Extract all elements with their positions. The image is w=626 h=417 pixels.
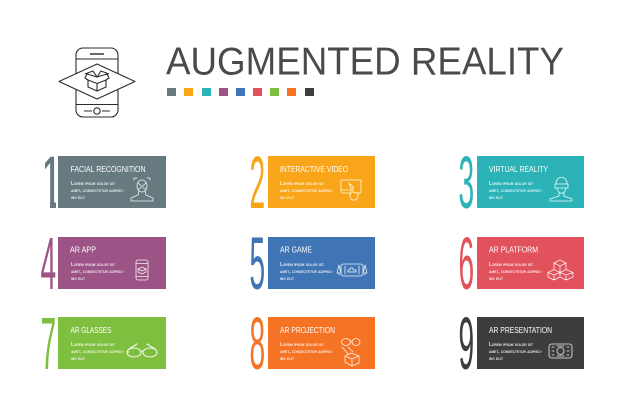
panel 4: AR app: AR APP bbox=[70, 246, 96, 254]
panel 8: AR projection: Lorem ipsum dolor sit bbox=[280, 342, 324, 348]
icon: cubes bbox=[548, 260, 573, 280]
panel 3: virtual reality: VIRTUAL REALITY bbox=[489, 165, 548, 174]
panel 4: AR app bbox=[40, 222, 166, 305]
icon: AR tablet bbox=[549, 344, 572, 358]
number 7: 7 bbox=[40, 302, 56, 385]
panel 3: virtual reality: Lorem ipsum dolor sit bbox=[489, 181, 533, 187]
panel 1: facial recognition: FACIAL RECOGNITION bbox=[70, 165, 146, 174]
panel 9: AR presentation: ing elit bbox=[489, 356, 503, 362]
panel 1: facial recognition: ing elit bbox=[71, 195, 85, 201]
panel 7: AR glasses: amet, consectetur adipisc- bbox=[71, 349, 124, 355]
panel 3: virtual reality: ing elit bbox=[489, 195, 503, 201]
panel 6: AR platform: amet, consectetur adipisc- bbox=[489, 269, 542, 275]
number 3: 3 bbox=[458, 141, 474, 224]
icon: touch video screen bbox=[341, 180, 361, 200]
title: AUGMENTED REALITY bbox=[166, 40, 564, 84]
number 5: 5 bbox=[250, 222, 265, 305]
icon: glasses projecting onto a box bbox=[342, 338, 360, 366]
panel 4: AR app: Lorem ipsum dolor sit bbox=[71, 262, 115, 268]
panel 7: AR glasses bbox=[40, 302, 166, 385]
panel 3: virtual reality: amet, consectetur adipisc- bbox=[489, 188, 542, 194]
icon: phone app bbox=[136, 260, 148, 280]
panel 9: AR presentation: AR PRESENTATION bbox=[489, 326, 552, 335]
panel 6: AR platform: AR PLATFORM bbox=[489, 246, 538, 254]
panel 7: AR glasses: ing elit bbox=[71, 356, 85, 362]
panel 6: AR platform: Lorem ipsum dolor sit bbox=[489, 262, 533, 268]
number 1: 1 bbox=[39, 141, 64, 224]
number 2: 2 bbox=[250, 141, 265, 224]
panel 2: interactive video: INTERACTIVE VIDEO bbox=[280, 165, 348, 174]
panel 9: AR presentation: Lorem ipsum dolor sit bbox=[489, 342, 533, 348]
panel 3: virtual reality bbox=[458, 141, 584, 224]
panel 5: AR game: Lorem ipsum dolor sit bbox=[280, 262, 324, 268]
panel 5: AR game: amet, consectetur adipisc- bbox=[280, 269, 333, 275]
number 6: 6 bbox=[458, 222, 474, 305]
icon: VR headset person bbox=[550, 177, 572, 201]
panel 1: facial recognition: Lorem ipsum dolor sit bbox=[71, 181, 115, 187]
panel 9: AR presentation: amet, consectetur adipisc- bbox=[489, 349, 542, 355]
panel 2: interactive video bbox=[250, 141, 375, 224]
icon: phone with AR box bbox=[59, 48, 135, 117]
icon: glasses bbox=[127, 344, 157, 357]
panel 6: AR platform: ing elit bbox=[489, 276, 503, 282]
panel 8: AR projection bbox=[250, 302, 375, 385]
panel 4: AR app: ing elit bbox=[71, 276, 85, 282]
panel 7: AR glasses: AR GLASSES bbox=[70, 326, 112, 335]
panel 4: AR app: amet, consectetur adipisc- bbox=[71, 269, 124, 275]
icon: face scan bbox=[131, 178, 153, 201]
panel 8: AR projection: AR PROJECTION bbox=[280, 326, 335, 335]
panel 2: interactive video: Lorem ipsum dolor sit bbox=[280, 181, 324, 187]
panel 8: AR projection: amet, consectetur adipisc- bbox=[280, 349, 333, 355]
panel 5: AR game bbox=[250, 222, 375, 305]
panel 2: interactive video: amet, consectetur adipisc- bbox=[280, 188, 333, 194]
panel 5: AR game: AR GAME bbox=[280, 246, 312, 254]
colour legend squares bbox=[167, 88, 314, 96]
number 9: 9 bbox=[458, 302, 474, 385]
icon: game device bbox=[337, 264, 367, 276]
panel 7: AR glasses: Lorem ipsum dolor sit bbox=[71, 342, 115, 348]
panel 1: facial recognition bbox=[45, 156, 166, 208]
number 4: 4 bbox=[40, 222, 56, 305]
number 8: 8 bbox=[250, 302, 265, 385]
panel 1: facial recognition: amet, consectetur adipisc- bbox=[71, 188, 124, 194]
panel 2: interactive video: ing elit bbox=[280, 195, 294, 201]
panel 5: AR game: ing elit bbox=[280, 276, 294, 282]
panel 6: AR platform bbox=[458, 222, 584, 305]
panel 9: AR presentation bbox=[458, 302, 584, 385]
panel 8: AR projection: ing elit bbox=[280, 356, 294, 362]
